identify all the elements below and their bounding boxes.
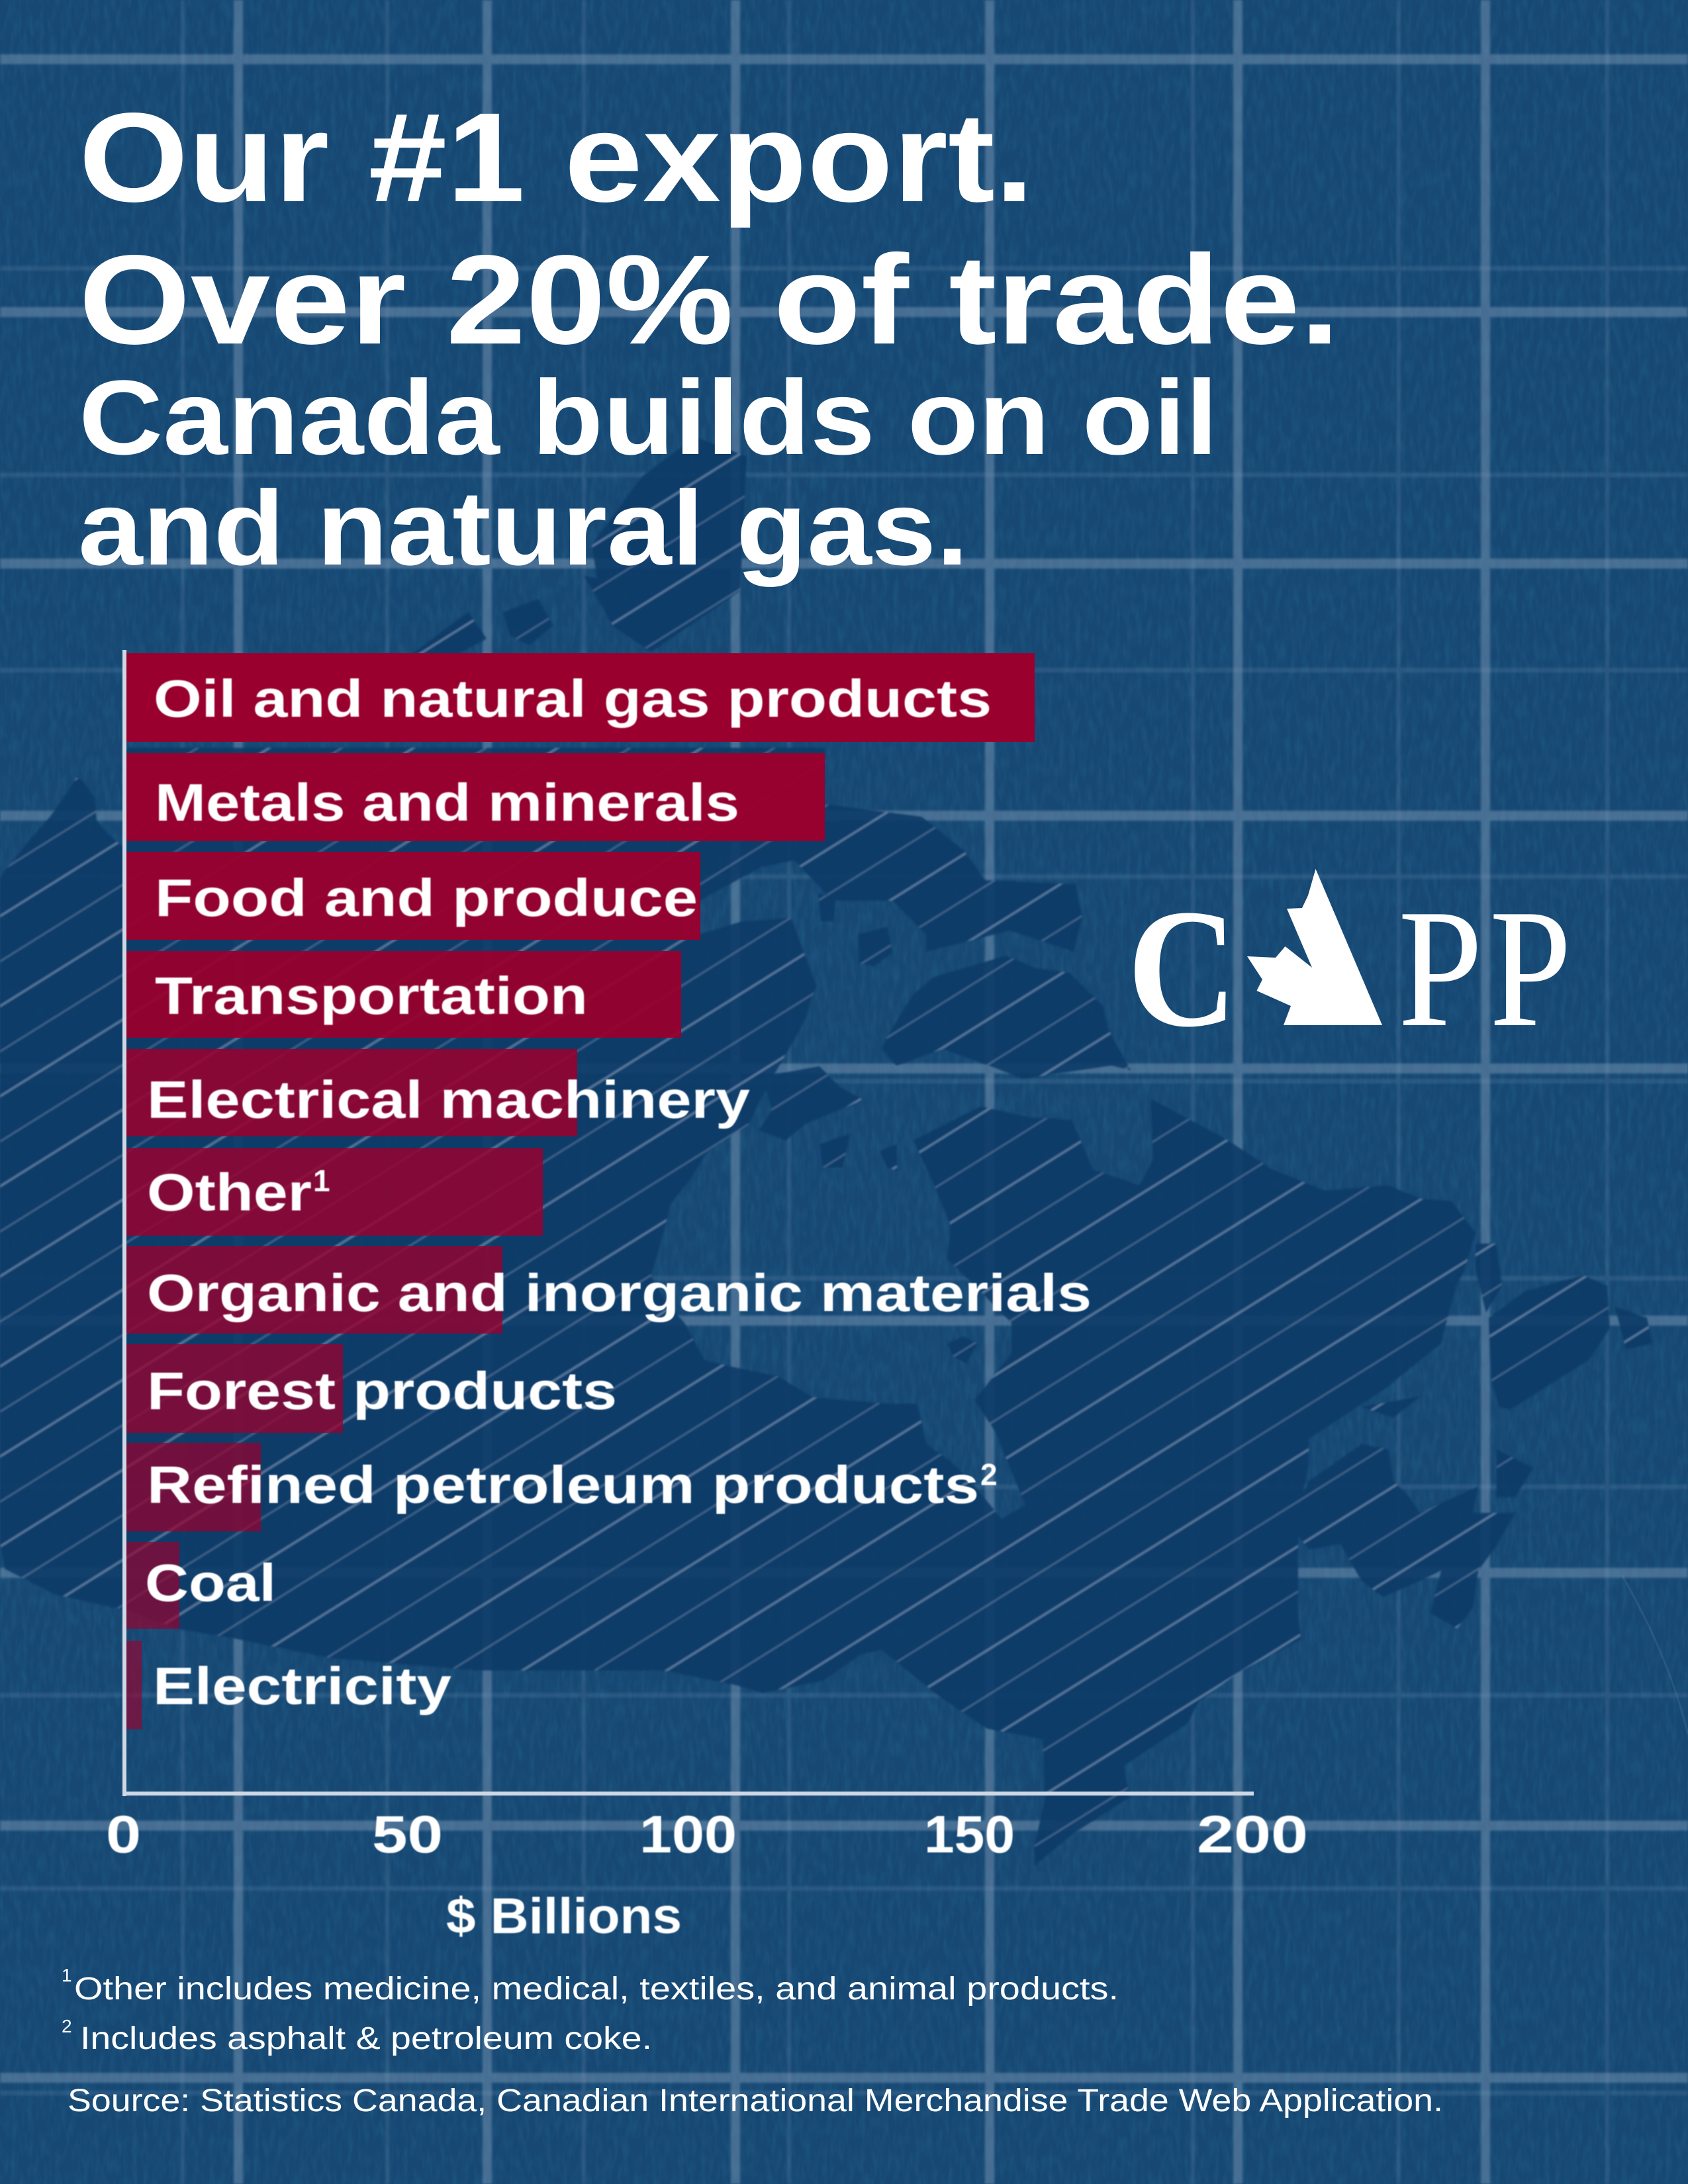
source line: Source: Statistics Canada, Canadian International Merchandise Trade Web Application. (68, 2083, 1443, 2118)
newfoundland and labrador strip (1489, 1275, 1610, 1410)
axis tick labels: 200 (1197, 1805, 1308, 1864)
axis tick labels: 150 (924, 1805, 1015, 1864)
bar labels (145, 669, 1092, 1715)
bar labels: Forest products (147, 1361, 617, 1420)
axes (122, 650, 1254, 1796)
bar chart: Canadian exports by sector (106, 650, 1308, 1944)
title (78, 86, 1340, 587)
mainland (0, 748, 1476, 1866)
logo letter C: C (1127, 875, 1237, 1062)
bar labels: 1 (313, 1163, 330, 1198)
bar labels: Electrical machinery (147, 1070, 751, 1129)
axis tick labels: 50 (372, 1805, 443, 1864)
logo letters PP: P (1398, 875, 1483, 1062)
bar labels: Transportation (155, 966, 588, 1025)
bar labels: Organic and inorganic materials (147, 1263, 1092, 1322)
bar labels: Metals and minerals (155, 773, 739, 832)
logo letters PP (1398, 875, 1571, 1062)
logo maple leaf A (1247, 869, 1382, 1025)
footnote 1: Other includes medicine, medical, textiles, and animal products. (74, 1972, 1119, 2007)
bar labels: Food and produce (155, 868, 698, 927)
bars (126, 653, 1035, 1729)
axis tick labels (106, 1805, 1308, 1864)
bar labels: Electricity (153, 1657, 452, 1715)
footnote 2: 2 (62, 2016, 72, 2036)
bar labels: Other (147, 1163, 312, 1222)
CAPP logo (1127, 869, 1571, 1062)
bar labels: 2 (980, 1457, 998, 1492)
axis tick labels: 100 (639, 1805, 737, 1864)
title: and natural gas. (78, 469, 968, 587)
title: Canada builds on oil (79, 358, 1218, 477)
title: Over 20% of trade. (79, 228, 1340, 371)
footnote 1: 1 (62, 1965, 72, 1985)
footnote 2: Includes asphalt & petroleum coke. (80, 2021, 652, 2056)
arctic islands (662, 748, 1082, 952)
logo letters PP: P (1489, 875, 1571, 1062)
bar labels: Refined petroleum products (147, 1455, 979, 1514)
axis tick labels: 0 (106, 1805, 141, 1864)
axis title: $ Billions (446, 1888, 682, 1944)
bar labels: Coal (145, 1553, 276, 1612)
map of Canada with diagonal hatching (0, 437, 1652, 1866)
title: Our #1 export. (79, 86, 1034, 228)
bar labels: Oil and natural gas products (154, 669, 992, 728)
maritimes (1288, 1444, 1515, 1629)
